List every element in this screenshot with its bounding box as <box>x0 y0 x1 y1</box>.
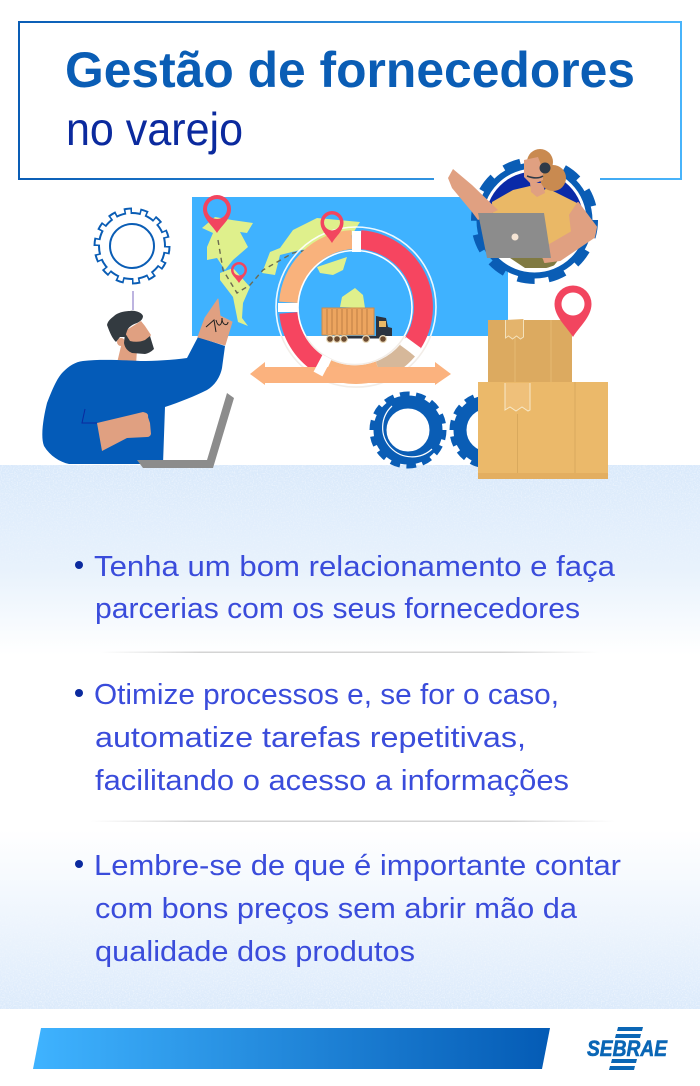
illustration: supply chain scene <box>42 149 608 479</box>
footer gradient bar <box>33 1028 550 1069</box>
map pin: europe <box>320 211 344 243</box>
tip 3: Lembre-se de que é importante contar <box>94 850 621 882</box>
laptop <box>137 393 234 468</box>
ring gap over arrow <box>318 357 327 374</box>
tip 3 <box>75 850 621 968</box>
circular supply ring <box>276 227 436 387</box>
world map panel <box>192 197 508 336</box>
truck icon <box>322 308 392 342</box>
bullet list <box>75 551 621 968</box>
gear medallion with woman operator <box>448 149 596 281</box>
SEBRAE logo <box>587 1027 668 1070</box>
tip 2: automatize tarefas repetitivas, <box>95 722 526 754</box>
map pin: boxes <box>554 286 592 337</box>
SEBRAE logo: SEBRAE <box>587 1036 668 1061</box>
tip 1: parcerias com os seus fornecedores <box>95 593 580 625</box>
cardboard boxes <box>478 319 608 479</box>
background panel: light blue fade <box>0 465 700 1009</box>
man pointing at map <box>42 299 232 464</box>
map pin: south america <box>231 262 247 283</box>
blue gears <box>372 394 524 466</box>
title frame <box>19 22 681 179</box>
icon: outline gear <box>96 210 168 310</box>
title heading: Gestão de fornecedores <box>65 42 635 98</box>
map pin: north america <box>203 195 231 233</box>
tip 1: Tenha um bom relacionamento e faça <box>94 551 616 583</box>
tip 1 <box>75 551 616 625</box>
tip 3: qualidade dos produtos <box>95 936 415 968</box>
tip 2: Otimize processos e, se for o caso, <box>94 679 559 711</box>
tip 2: facilitando o acesso a informações <box>95 765 569 797</box>
double arrow <box>250 362 451 385</box>
tip 3: com bons preços sem abrir mão da <box>95 893 578 925</box>
tip 2 <box>75 679 569 797</box>
subtitle: no varejo <box>66 103 243 155</box>
